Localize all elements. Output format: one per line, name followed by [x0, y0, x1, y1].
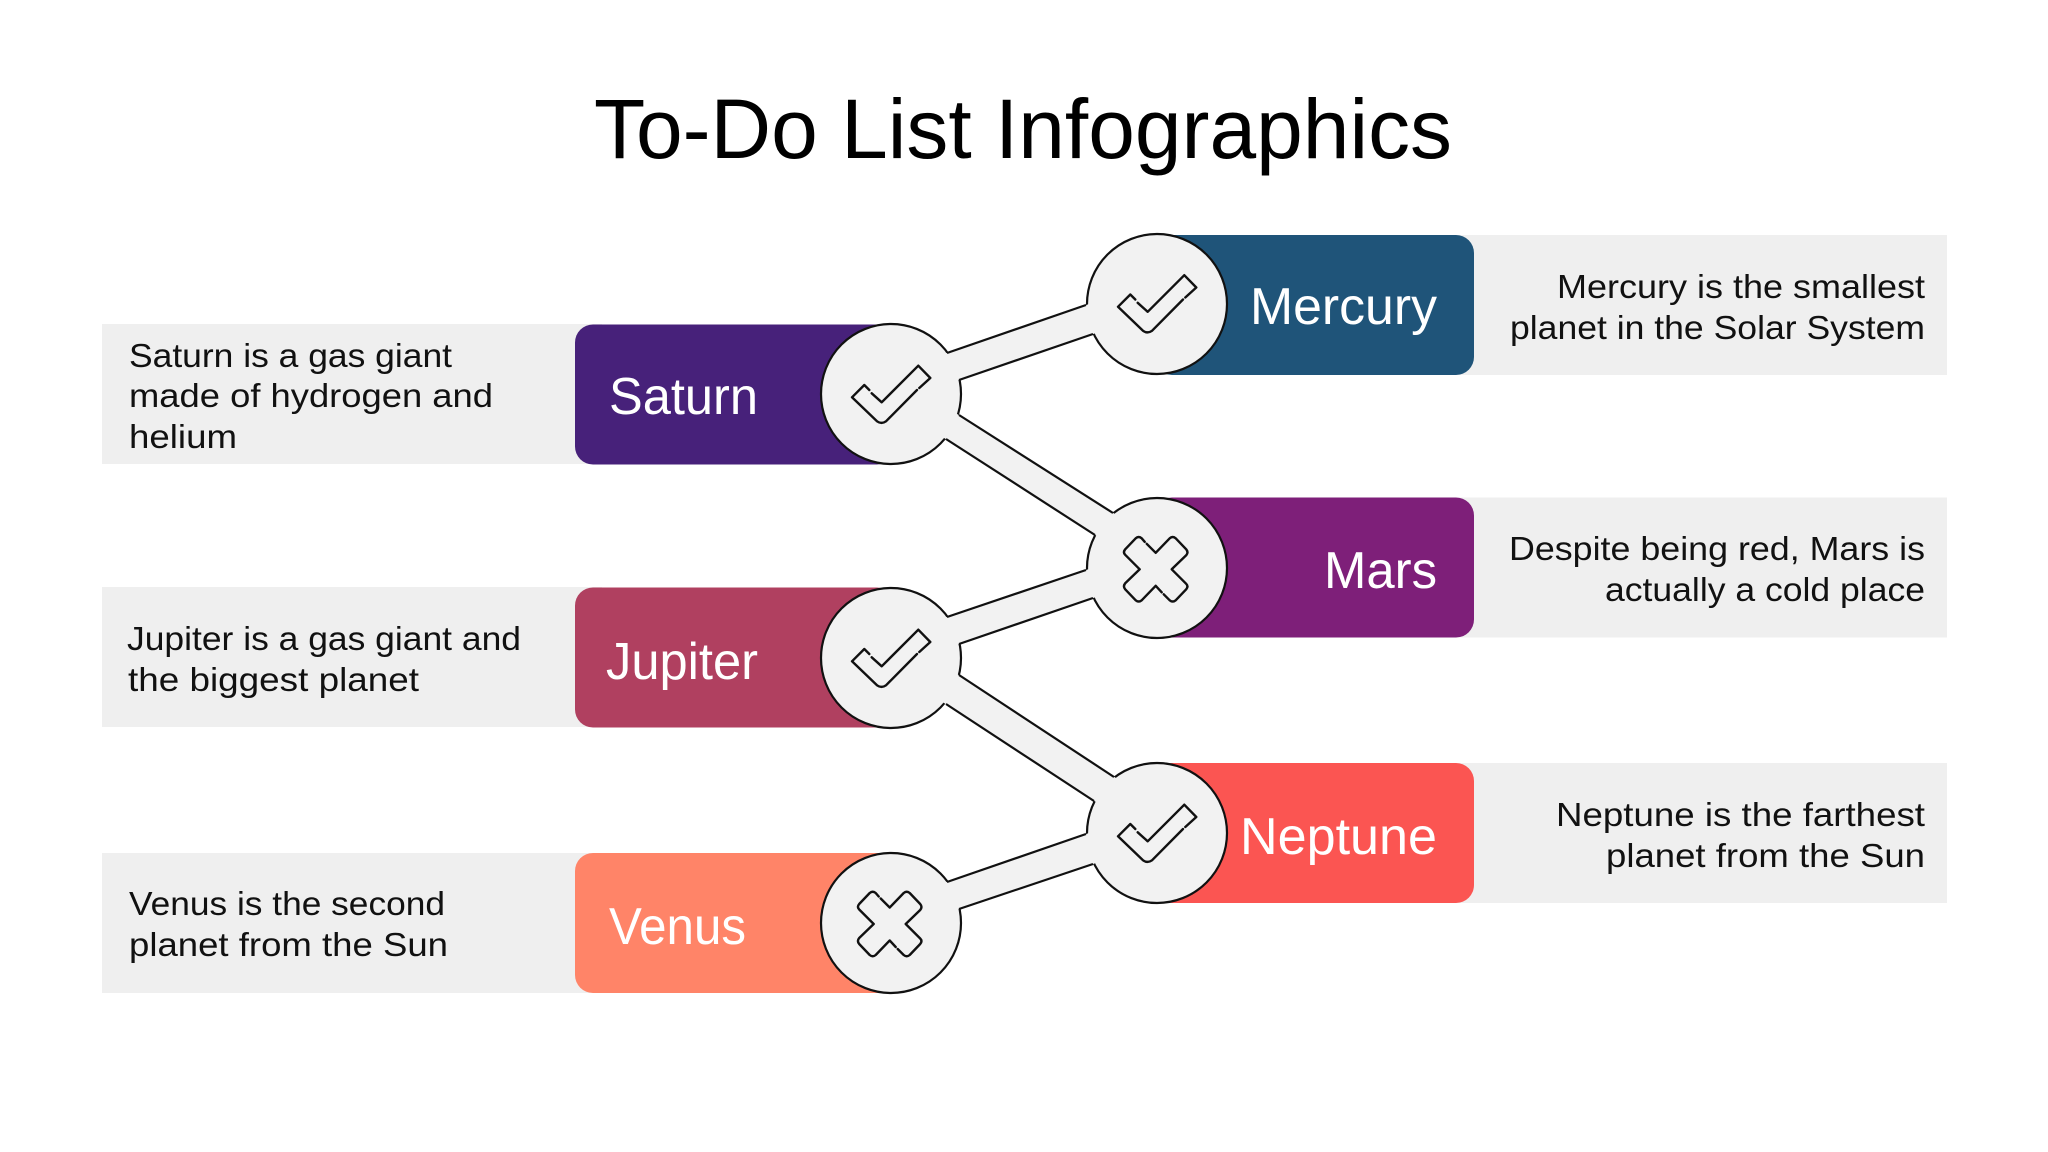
Jupiter description: Jupiter is a gas giant and [127, 620, 521, 657]
Venus description: planet from the Sun [129, 926, 448, 963]
node: Mercury check [1087, 234, 1227, 374]
Neptune description [1556, 796, 1925, 874]
Saturn description [129, 337, 493, 455]
Mars description: Despite being red, Mars is [1509, 530, 1925, 567]
node: Saturn check [821, 324, 961, 464]
node: Mars cross [1087, 498, 1227, 638]
Mercury description: Mercury is the smallest [1557, 268, 1925, 305]
Neptune description: Neptune is the farthest [1556, 796, 1925, 833]
connector: Saturn to Mars [941, 412, 1118, 538]
icon: check [852, 366, 930, 423]
connector: Saturn to Mercury [941, 303, 1099, 382]
Saturn description: Saturn is a gas giant [129, 337, 452, 374]
icon: check [1118, 275, 1196, 332]
panel: Jupiter [102, 587, 895, 728]
panel: Mars [1154, 498, 1947, 638]
icon: check [1118, 805, 1196, 862]
Venus label: Venus [609, 898, 746, 956]
node: Venus cross [821, 853, 961, 993]
Mars description [1509, 530, 1925, 608]
Saturn description: helium [129, 418, 237, 455]
Mercury label: Mercury [1250, 278, 1437, 336]
Jupiter description: the biggest planet [128, 661, 419, 698]
panel: Saturn [102, 324, 895, 464]
panel: Neptune [1154, 763, 1947, 903]
connector: Venus to Neptune [941, 832, 1099, 911]
title: To-Do List Infographics [594, 82, 1452, 176]
Saturn label: Saturn [609, 368, 758, 426]
Saturn description: made of hydrogen and [129, 377, 493, 414]
Neptune description: planet from the Sun [1606, 837, 1925, 874]
icon: cross [858, 892, 921, 956]
node: Jupiter check [821, 588, 961, 728]
Jupiter label: Jupiter [606, 633, 758, 691]
node: Neptune check [1087, 763, 1227, 903]
icon: cross [1124, 537, 1187, 602]
icon: check [852, 630, 930, 687]
panel: Mercury [1154, 235, 1947, 375]
Mercury description [1510, 268, 1925, 346]
Neptune label: Neptune [1240, 808, 1437, 866]
Venus description: Venus is the second [129, 885, 445, 922]
panel: Venus [102, 853, 895, 993]
Mars label: Mars [1324, 542, 1437, 600]
connector: Jupiter to Mars [941, 568, 1099, 646]
Mars description: actually a cold place [1605, 571, 1925, 608]
Jupiter description [127, 620, 521, 698]
connector: Jupiter to Neptune [941, 672, 1119, 804]
Mercury description: planet in the Solar System [1510, 309, 1925, 346]
Venus description [129, 885, 448, 963]
